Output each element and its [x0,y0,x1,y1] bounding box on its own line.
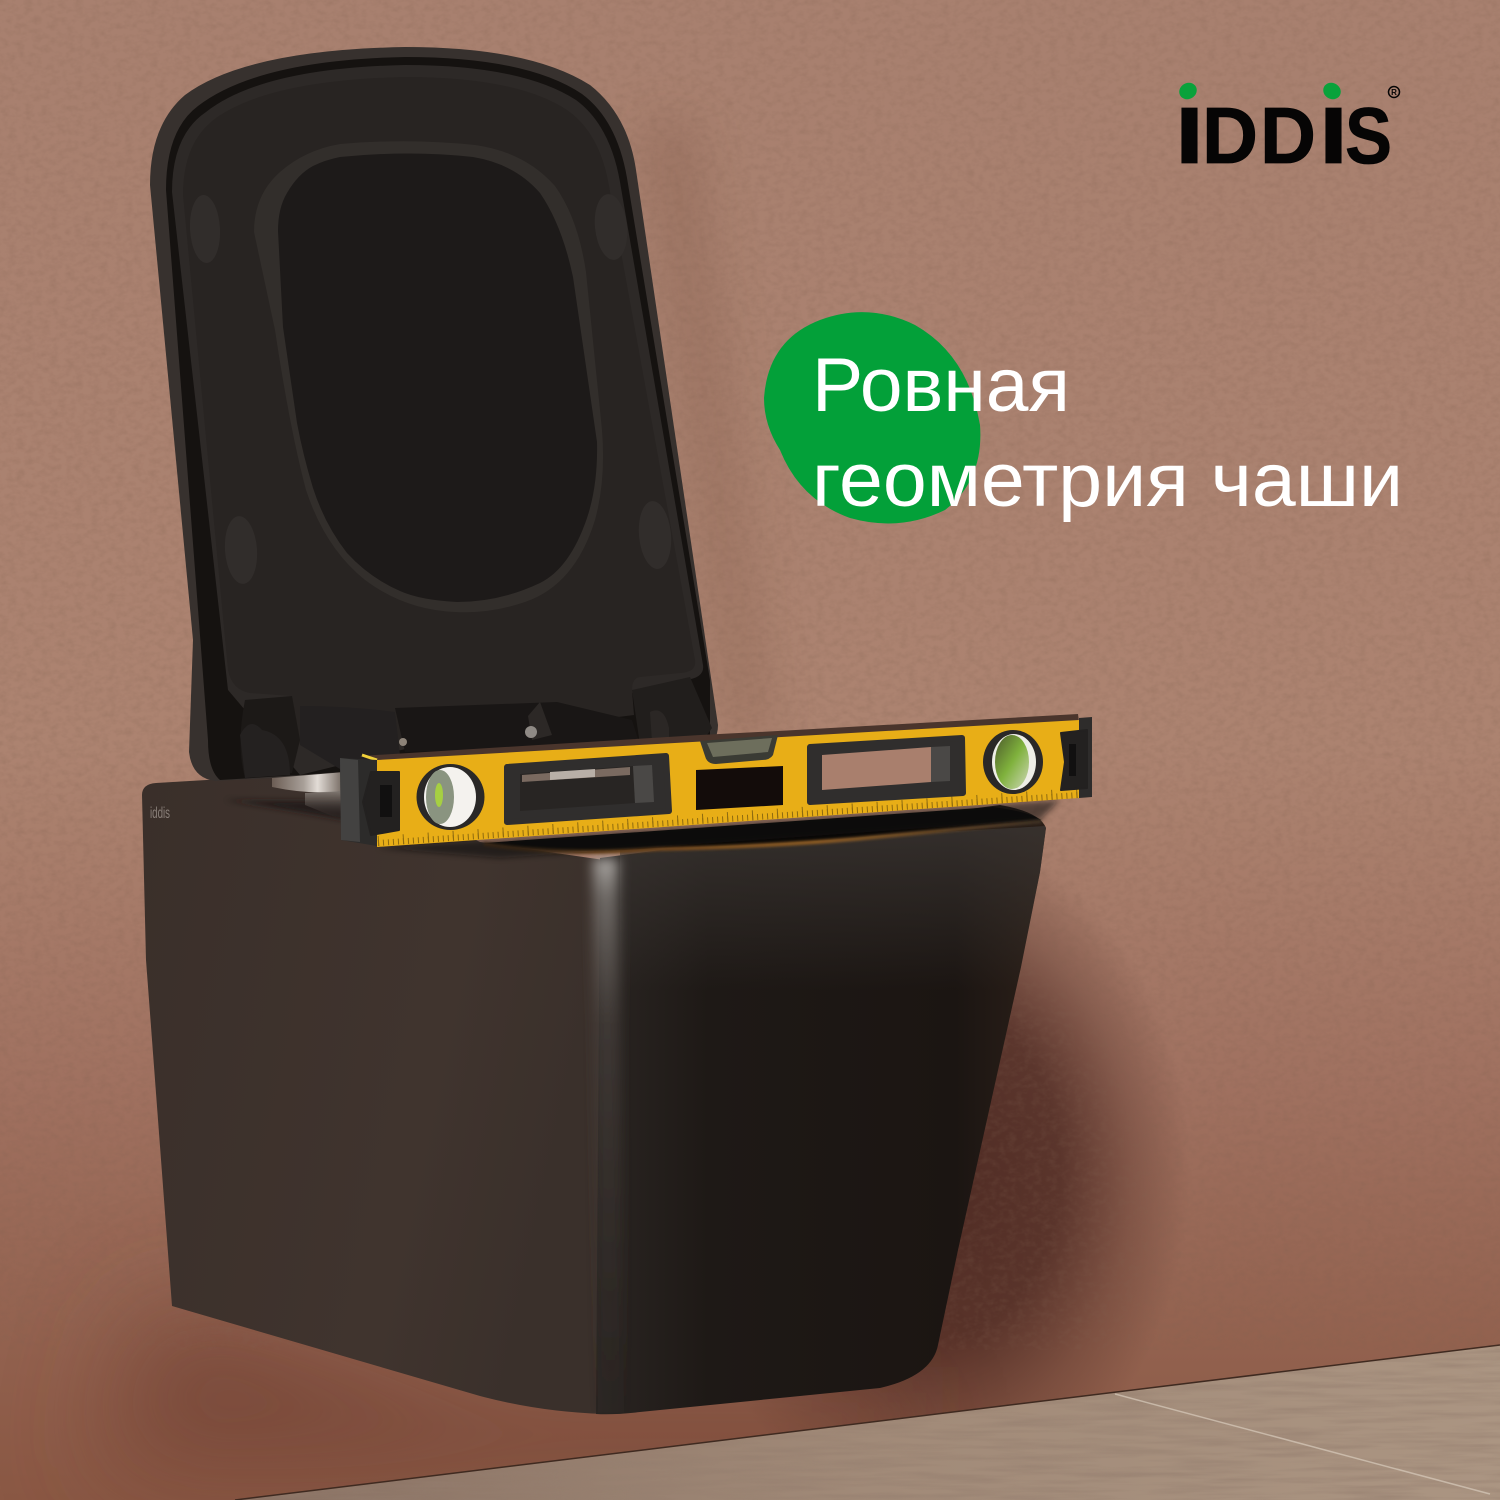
level top accent [362,755,377,760]
level shadow on bowl [377,800,1060,858]
spirit level [340,714,1092,858]
heading: Ровная [812,343,1070,428]
lid oval recess [278,154,597,602]
lid dark channel [166,57,710,780]
bowl top shadow under level [225,800,345,820]
small brand mark on bowl: iddis [150,805,170,822]
seat lid [150,47,718,781]
bowl right face upper sheen [620,826,1046,938]
green blob behind heading [764,312,980,523]
right handle [810,738,963,802]
registered mark [1388,86,1400,98]
level yellow body [377,720,1079,847]
chrome fixing [272,772,342,820]
hinge area [240,677,712,778]
logo: IDDIS: S [1345,91,1392,180]
bowl corner highlight [593,858,624,1414]
logo: IDDIS: D [1260,91,1316,180]
logo: IDDIS [1175,80,1400,180]
centre black window [696,766,783,810]
floor [235,1345,1500,1500]
logo: IDDIS: I [1175,91,1204,180]
lid bumpers [188,193,674,585]
toilet bowl [142,772,1046,1414]
lid rim ridge [172,65,703,775]
level ruler ticks [378,793,1078,843]
left handle [507,756,669,822]
right end cap [1061,717,1092,798]
left end cap [340,758,399,846]
centre vial window [700,735,778,764]
lid oval ring [254,141,603,612]
logo: IDDIS: I [1319,91,1348,180]
registered mark: R [1391,88,1397,97]
lid outer shell [150,47,718,781]
heading: геометрия чаши [812,438,1403,523]
bowl opening [484,807,1041,851]
logo green dots [1176,80,1344,102]
right round vial [983,730,1043,794]
bowl right face [596,805,1046,1414]
left round vial [416,764,484,830]
logo: IDDIS: D [1202,91,1258,180]
level top edge [360,714,1079,762]
heading [812,343,1403,523]
bowl rim glow [484,821,1041,852]
lid inner panel [183,77,695,745]
bowl left face [142,772,604,1414]
